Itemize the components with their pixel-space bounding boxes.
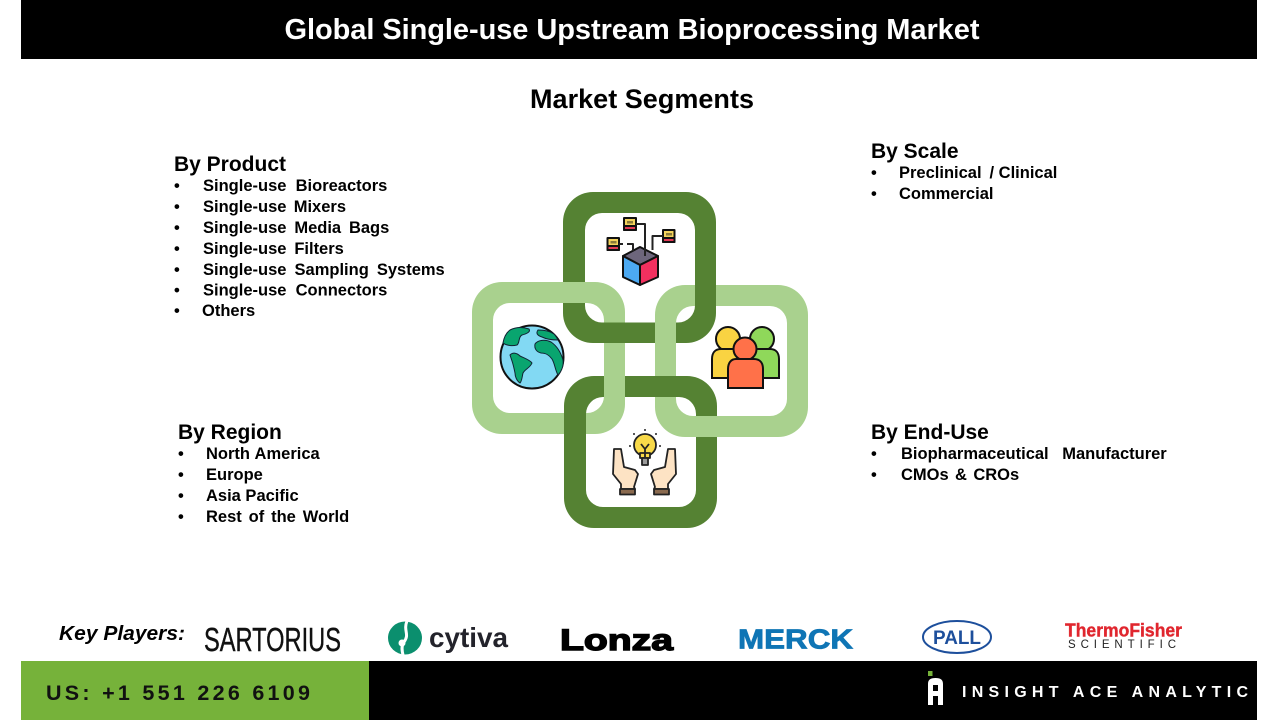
- text block: by scale: Preclinical: [899, 164, 982, 182]
- text block: by end-use: •: [871, 445, 877, 463]
- text block: by region: Asia Pacific: [206, 487, 299, 505]
- text block: by product: Single-use Mixers: [203, 198, 346, 216]
- text block: by scale: / Clinical: [990, 164, 1057, 182]
- text block: by product: •: [174, 302, 180, 320]
- text block: by end-use: •: [871, 466, 877, 484]
- logo: merck: MERCK: [738, 624, 853, 654]
- heading: market segments: Market Segments: [530, 84, 754, 114]
- text block: by scale: By Scale: [871, 140, 959, 163]
- icon: people group: [712, 327, 779, 388]
- text block: by product: •: [174, 240, 180, 258]
- text block: by product: Single-use Filters: [203, 240, 344, 258]
- text block: by region: North America: [206, 445, 321, 463]
- contact bar: phone: US: +1 551 226 6109: [46, 681, 310, 705]
- logo: pall: PALL: [933, 628, 981, 649]
- text block: by region: By Region: [178, 421, 282, 444]
- text block: by region: Rest of the World: [206, 508, 349, 526]
- text block: by product: •: [174, 198, 180, 216]
- text block: by product: Single-use Sampling Systems: [203, 261, 445, 279]
- ring: top dark: [563, 192, 716, 343]
- crossing: top ring over right ring: [695, 284, 716, 307]
- key players label: Key Players:: [59, 622, 185, 645]
- text block: by product: Single-use Connectors: [203, 282, 387, 300]
- interlocking rings diagram: [472, 192, 808, 528]
- text block: by end-use: [871, 421, 1167, 484]
- text block: by scale: [871, 140, 1057, 203]
- text block: by region: •: [178, 466, 184, 484]
- logo: thermo fisher scientific: SCIENTIFIC: [1068, 639, 1176, 651]
- text block: by scale: •: [871, 185, 877, 203]
- logo: cytiva: cytiva: [429, 622, 508, 653]
- text block: by scale: •: [871, 164, 877, 182]
- ring: right light: [655, 285, 808, 437]
- logo: cytiva: [388, 621, 508, 655]
- icon: globe: [500, 326, 564, 388]
- text block: by product: •: [174, 219, 180, 237]
- logo: sartorius: SARTORIUS: [204, 621, 341, 658]
- text block: by region: •: [178, 445, 184, 463]
- brand bar: insight ace analytic: INSIGHT ACE ANALYTIC: [962, 684, 1248, 701]
- text block: by region: •: [178, 508, 184, 526]
- text block: by product: [174, 153, 445, 320]
- icon: insight ace logo: [928, 671, 943, 705]
- crossing: top ring over left ring: [603, 322, 626, 343]
- text block: by product: Single-use Media Bags: [203, 219, 389, 237]
- text block: by end-use: By End-Use: [871, 421, 989, 444]
- text block: by scale: Commercial: [899, 185, 993, 203]
- text block: by end-use: CMOs & CROs: [901, 466, 1019, 484]
- text block: by product: Others: [202, 302, 255, 320]
- text block: by product: •: [174, 282, 180, 300]
- logo: pall: [923, 621, 991, 653]
- text block: by product: Single-use Bioreactors: [203, 177, 387, 195]
- logo: thermo fisher scientific: [1065, 620, 1182, 651]
- text block: by product: By Product: [174, 153, 286, 176]
- crossing: bottom ring over left ring: [564, 412, 586, 435]
- text block: by end-use: Biopharmaceutical Manufacturer: [901, 445, 1167, 463]
- brand bar: insight ace analytic: [369, 661, 1257, 720]
- title banner: Global Single-use Upstream Bioprocessing Market: [284, 14, 980, 46]
- icon: modular box: [608, 218, 674, 285]
- text block: by region: •: [178, 487, 184, 505]
- icon: hands with light bulb: [613, 429, 676, 494]
- text block: by product: •: [174, 261, 180, 279]
- text block: by product: •: [174, 177, 180, 195]
- text block: by region: [178, 421, 349, 526]
- logo: lonza: Lonza: [560, 624, 673, 657]
- ring: left light: [472, 282, 625, 434]
- title banner: [21, 0, 1257, 59]
- text block: by region: Europe: [206, 466, 263, 484]
- crossing: bottom ring over right ring: [654, 376, 677, 397]
- ring: bottom dark: [564, 376, 717, 528]
- contact bar: phone: [21, 661, 369, 720]
- logo: thermo fisher scientific: ThermoFisher: [1065, 620, 1182, 640]
